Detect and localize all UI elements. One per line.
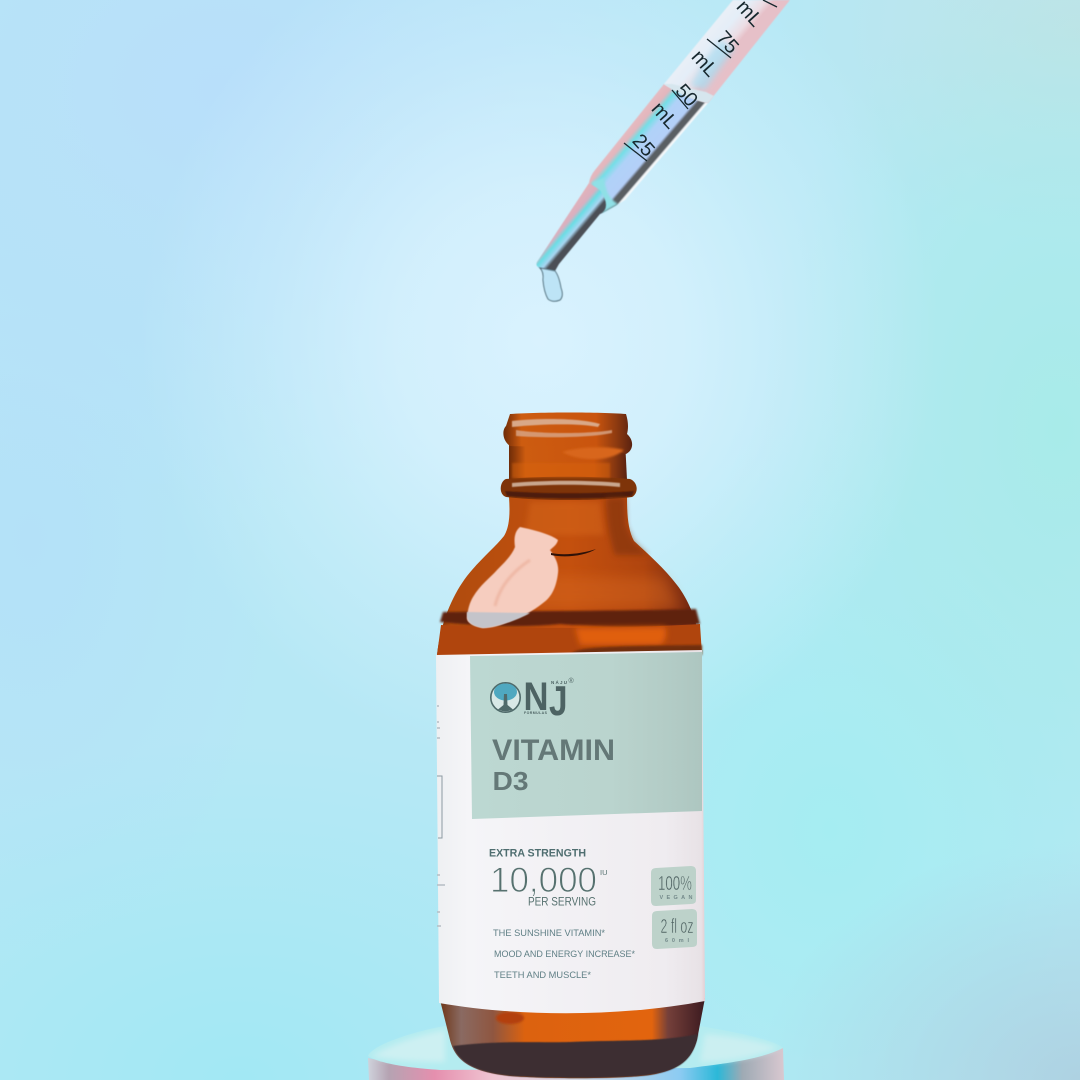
bottle mid amber glow — [530, 575, 680, 608]
badge: 2 fl oz — [652, 909, 697, 949]
bottle: amber glass with label — [436, 412, 705, 1078]
dropper narrow tip — [536, 183, 606, 271]
dropper: glass pipette with measurement marks — [536, 0, 790, 301]
bottle reflection: lower cool part — [467, 612, 530, 628]
logo J letter: J — [549, 677, 568, 724]
bottle meniscus detail — [551, 549, 596, 556]
bottle base: amber and dark liquid — [440, 998, 705, 1078]
badge: 100% vegan: VEGAN — [660, 895, 693, 901]
bottle body: shoulder and neck — [437, 497, 702, 655]
logo registered mark: ® — [568, 677, 574, 685]
benefits list — [493, 928, 635, 981]
dropper bright collar — [664, 84, 714, 103]
product title: D3 — [492, 766, 528, 796]
bottle white label — [436, 650, 705, 1013]
badge: 2 fl oz: 2 fl oz — [660, 916, 694, 938]
dropper scale marks: 50 — [671, 80, 702, 111]
pedestal: glass block under bottle — [368, 1026, 784, 1080]
bottle right shoulder shade — [606, 497, 648, 555]
dropper drop nozzle — [540, 268, 562, 301]
bottle neck shadow — [512, 463, 610, 478]
bottle reflection: window highlight — [467, 527, 558, 628]
bottle neck upper — [509, 440, 627, 480]
bottle neck ring — [501, 477, 637, 500]
benefits list: TEETH AND MUSCLE* — [494, 970, 591, 981]
extra strength heading: EXTRA STRENGTH — [489, 848, 586, 860]
dropper shoulder blotch — [592, 178, 618, 213]
bottle neck glow — [525, 502, 604, 535]
badge: 100% vegan — [651, 866, 696, 906]
dropper scale marks: mL — [647, 98, 682, 133]
dropper scale marks — [624, 0, 777, 161]
product title — [492, 734, 615, 796]
logo Formulas wordmark: FORMULAS — [524, 711, 548, 715]
logo tree icon — [491, 683, 520, 712]
label green panel — [470, 652, 702, 819]
dropper scale marks: 75 — [712, 27, 743, 58]
benefits list: MOOD AND ENERGY INCREASE* — [494, 949, 635, 960]
bottle lower amber band — [437, 624, 702, 655]
badge: 100% vegan: 100% — [658, 873, 692, 895]
bottle lip — [503, 412, 632, 454]
badge: 2 fl oz: 60ml — [665, 938, 689, 944]
dose: 10,000 IU per serving: PER SERVING — [528, 896, 596, 908]
product title: VITAMIN — [492, 734, 615, 767]
logo Naju wordmark: NÁJU — [551, 679, 567, 685]
dropper upper pale section — [664, 0, 790, 103]
dropper scale marks: mL — [687, 46, 722, 81]
dose: 10,000 IU per serving: IU — [600, 868, 608, 877]
dropper scale marks: 25 — [628, 130, 659, 161]
bottle reflection: crease — [495, 560, 530, 606]
dropper upper blue patches — [690, 40, 735, 90]
dose: 10,000 IU per serving: 10,000 — [490, 860, 597, 900]
side panel faint legal text — [437, 706, 445, 926]
logo: NJ Naju Formulas — [491, 675, 574, 724]
dropper lower tube — [589, 84, 708, 214]
benefits list: THE SUNSHINE VITAMIN* — [493, 928, 605, 939]
bottle dark liquid line — [440, 609, 700, 627]
logo N letter: N — [524, 675, 548, 719]
